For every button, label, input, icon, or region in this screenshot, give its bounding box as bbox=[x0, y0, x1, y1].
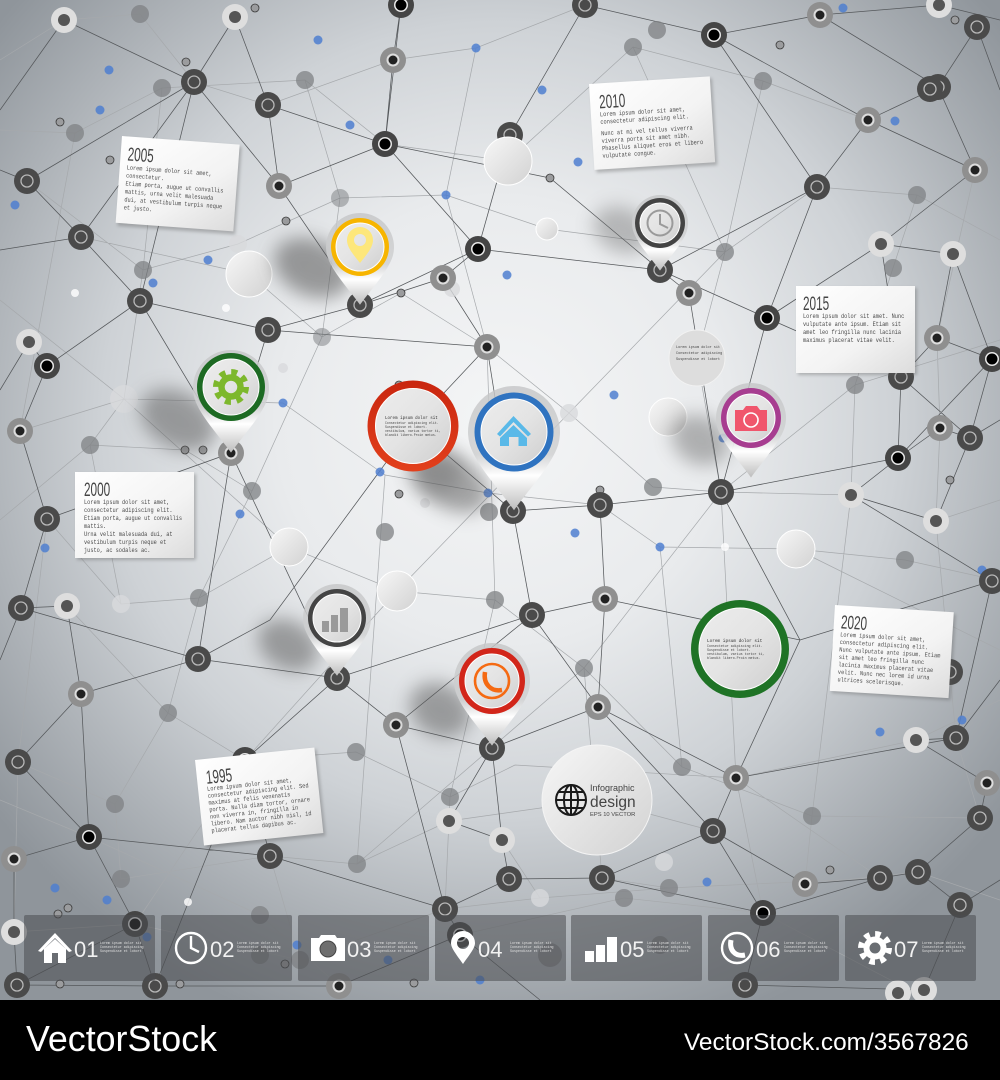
pin: bar chart bbox=[248, 584, 371, 682]
ring nodes bbox=[51, 7, 77, 33]
icon: phone bbox=[475, 664, 509, 698]
red text circle: Lorem ipsum dolor sit bbox=[385, 416, 438, 421]
bottom panel 02 bbox=[161, 915, 292, 981]
card: 1995: maximus at felis venenatis bbox=[208, 791, 291, 807]
bottom panel 05: Consectetur adipiscing bbox=[647, 945, 691, 949]
bottom panel 05: Lorem ipsum dolor sit bbox=[647, 941, 689, 945]
green text circle: Consectetur adipiscing elit. bbox=[707, 644, 762, 648]
bottom panel 04: Suspendisse et lobort bbox=[510, 949, 552, 953]
bottom panel 02: Consectetur adipiscing bbox=[237, 945, 281, 949]
card: 1995: libero. Nam auctor nibh nisl, id bbox=[210, 810, 312, 828]
card: 2005: consectetur. bbox=[126, 172, 164, 182]
card: 2020: sit amet leo fringilla nunc bbox=[839, 653, 925, 666]
icon: globe bbox=[556, 785, 586, 815]
bottom panel 02: Suspendisse et lobort bbox=[237, 949, 279, 953]
card: 2020: lacinia maximus placerat vitae bbox=[838, 661, 934, 674]
card: 2000: Lorem ipsum dolor sit amet, bbox=[84, 499, 169, 506]
bottom panel 03 bbox=[298, 915, 429, 981]
card: 2020: 2020 bbox=[840, 613, 868, 635]
card: 2010 bbox=[589, 76, 717, 173]
card: 2000: consectetur adipiscing elit. bbox=[84, 507, 173, 514]
card: 2005: dui, at vestibulum turpis neque bbox=[124, 196, 223, 211]
logo badge bbox=[542, 745, 652, 855]
card: 2005: Lorem ipsum dolor sit amet, bbox=[126, 164, 212, 178]
pale blobs bbox=[71, 235, 729, 907]
red text circle: vestibulum, varius tortor ti, bbox=[385, 429, 441, 433]
icon: bars bbox=[585, 937, 617, 962]
green text circle: vestibulum, varius tortor ti, bbox=[707, 652, 764, 656]
pin: camera bbox=[662, 383, 786, 478]
icon: phone bbox=[722, 933, 752, 963]
card: 2020: Nunc vulputate ante ipsum. Etiam bbox=[839, 646, 941, 660]
card: 1995: Lorem ipsum dolor sit amet, bbox=[207, 777, 293, 793]
card: 1995: non viverra in, fringilla in bbox=[210, 804, 299, 821]
bottom panel 06: Consectetur adipiscing bbox=[784, 945, 828, 949]
bottom panel 03: Suspendisse et lobort bbox=[374, 949, 416, 953]
icon: camera bbox=[735, 406, 767, 431]
icon: gear bbox=[216, 372, 246, 402]
icon: home bbox=[497, 416, 531, 446]
red text circle bbox=[368, 380, 462, 494]
card: 2015: Lorem ipsum dolor sit amet. Nunc bbox=[803, 313, 905, 320]
bottom panel 01 bbox=[24, 915, 155, 981]
card: 2010: consectetur adipiscing elit. bbox=[600, 113, 689, 126]
card: 2015 bbox=[796, 286, 917, 375]
bottom panel 01: 01 bbox=[74, 937, 98, 962]
bottom panel 04: Consectetur adipiscing bbox=[510, 945, 554, 949]
bottom panel 02: Lorem ipsum dolor sit bbox=[237, 941, 279, 945]
card: 2010: viverra porta sit amet nibh. bbox=[601, 132, 690, 145]
bottom panel 02: 02 bbox=[210, 937, 234, 962]
bottom panel 04 bbox=[435, 915, 566, 981]
pin: clock bbox=[586, 195, 688, 271]
card: 2010: 2010 bbox=[599, 91, 626, 113]
green text circle: Lorem ipsum dolor sit bbox=[707, 639, 763, 644]
icon: bars bbox=[322, 608, 348, 632]
card: 2000: Urna velit malesuada dui, at bbox=[84, 531, 173, 538]
pin: location bbox=[264, 213, 394, 310]
icon: clock bbox=[176, 933, 206, 963]
bottom panel 01: Lorem ipsum dolor sit bbox=[100, 941, 142, 945]
bottom panel 06: Lorem ipsum dolor sit bbox=[784, 941, 826, 945]
card: 2000: 2000 bbox=[84, 480, 110, 501]
plain sphere nodes bbox=[226, 137, 815, 611]
card: 2005: Etiam porta, augue ut convallis bbox=[125, 180, 224, 195]
card: 2020: Lorem ipsum dolor sit amet, bbox=[840, 631, 926, 644]
red text circle: blandit libero.Proin metus. bbox=[385, 433, 437, 437]
card: 2015: amet leo fringilla nunc lacinia bbox=[803, 329, 902, 336]
logo badge: EPS 10 VECTOR bbox=[590, 812, 635, 818]
text sphere: Consectetur adipiscing bbox=[676, 351, 722, 356]
card: 2020: velit. Nunc nec lorem id urna bbox=[838, 668, 930, 682]
green text circle: Suspendisse et lobort. bbox=[707, 648, 751, 652]
text sphere: Suspendisse et lobort bbox=[676, 357, 720, 362]
text sphere: Lorem ipsum dolor sit bbox=[676, 345, 720, 350]
icon: location bbox=[347, 227, 373, 263]
red text circle: Suspendisse et lobort. bbox=[385, 425, 427, 429]
card: 2005: 2005 bbox=[127, 145, 155, 167]
icon: gear bbox=[861, 934, 889, 962]
card: 1995: consectetur adipiscing elit. Sed bbox=[207, 782, 309, 800]
bottom panel 07: Suspendisse et lobort bbox=[922, 949, 964, 953]
green text circle bbox=[691, 600, 789, 698]
bottom panel 07: Lorem ipsum dolor sit bbox=[922, 941, 964, 945]
icon: camera bbox=[311, 935, 345, 961]
card: 2015: maximus placerat vitae velit. bbox=[803, 337, 895, 344]
card: 2020: consectetur adipiscing elit. bbox=[840, 638, 928, 651]
pin: phone bbox=[399, 643, 530, 749]
card: 1995: 1995 bbox=[205, 766, 233, 789]
bottom panel 03: 03 bbox=[347, 937, 371, 962]
bottom panel 05 bbox=[571, 915, 702, 981]
gray blobs bbox=[66, 5, 926, 969]
bottom panel 01: Suspendisse et lobort bbox=[100, 949, 142, 953]
card: 2005: mattis, urna velit malesuada bbox=[125, 188, 214, 202]
icon: clock bbox=[648, 210, 672, 236]
footer band: VectorStock bbox=[26, 1019, 217, 1059]
card: 2000: mattis. bbox=[84, 523, 106, 530]
card: 2005 bbox=[115, 136, 242, 235]
card: 2010: Phasellus aliquet eros et libero bbox=[602, 139, 704, 152]
card: 2015: 2015 bbox=[803, 294, 829, 315]
bottom panel 07 bbox=[845, 915, 976, 981]
bottom panel 03: Lorem ipsum dolor sit bbox=[374, 941, 416, 945]
card: 2020 bbox=[830, 605, 956, 700]
logo badge: Infographic bbox=[590, 783, 635, 793]
bottom panel 04: Lorem ipsum dolor sit bbox=[510, 941, 552, 945]
bottom panel 06: 06 bbox=[756, 937, 780, 962]
card: 2010: Lorem ipsum dolor sit amet, bbox=[600, 106, 685, 119]
bottom panel 01: Consectetur adipiscing bbox=[100, 945, 144, 949]
card: 2000 bbox=[75, 472, 196, 560]
bottom panel 05: Suspendisse et lobort bbox=[647, 949, 689, 953]
bottom panel 06 bbox=[708, 915, 839, 981]
bottom panel 07: 07 bbox=[894, 937, 918, 962]
icon: home bbox=[38, 933, 72, 963]
text sphere bbox=[669, 330, 725, 386]
bottom panel 06: Suspendisse et lobort bbox=[784, 949, 826, 953]
card: 2010: Nunc at mi vel tellus viverra bbox=[601, 124, 693, 137]
logo badge: design bbox=[590, 794, 636, 811]
card: 2020: ultrices scelerisque. bbox=[837, 676, 904, 688]
bottom panel 07: Consectetur adipiscing bbox=[922, 945, 966, 949]
bottom panel 03: Consectetur adipiscing bbox=[374, 945, 418, 949]
card: 2000: vestibulum turpis neque et bbox=[84, 539, 166, 546]
footer band: VectorStock.com/3567826 bbox=[684, 1029, 969, 1056]
footer band bbox=[0, 1000, 1000, 1080]
red text circle: Consectetur adipiscing elit. bbox=[385, 421, 439, 425]
pin: home bbox=[401, 386, 560, 526]
card: 1995: placerat tellus dapibus ac. bbox=[211, 818, 297, 835]
green text circle: blandit libero.Proin metus. bbox=[707, 656, 760, 660]
card: 2000: justo, ac sodales ac. bbox=[84, 547, 150, 554]
bottom panel 04: 04 bbox=[478, 937, 502, 962]
card: 2015: vulputate ante ipsum. Etiam sit bbox=[803, 321, 901, 328]
card: 2010: vulputate congue. bbox=[602, 149, 656, 160]
pin: gear bbox=[129, 350, 269, 464]
icon: location bbox=[451, 931, 475, 964]
card: 1995: porta. Nulla diam tortor, ornare bbox=[209, 796, 311, 814]
card: 2005: et justo. bbox=[123, 204, 152, 214]
card: 2000: Etiam porta, augue ut convallis bbox=[84, 515, 182, 522]
bottom panel 05: 05 bbox=[620, 937, 644, 962]
card: 1995 bbox=[195, 747, 326, 849]
